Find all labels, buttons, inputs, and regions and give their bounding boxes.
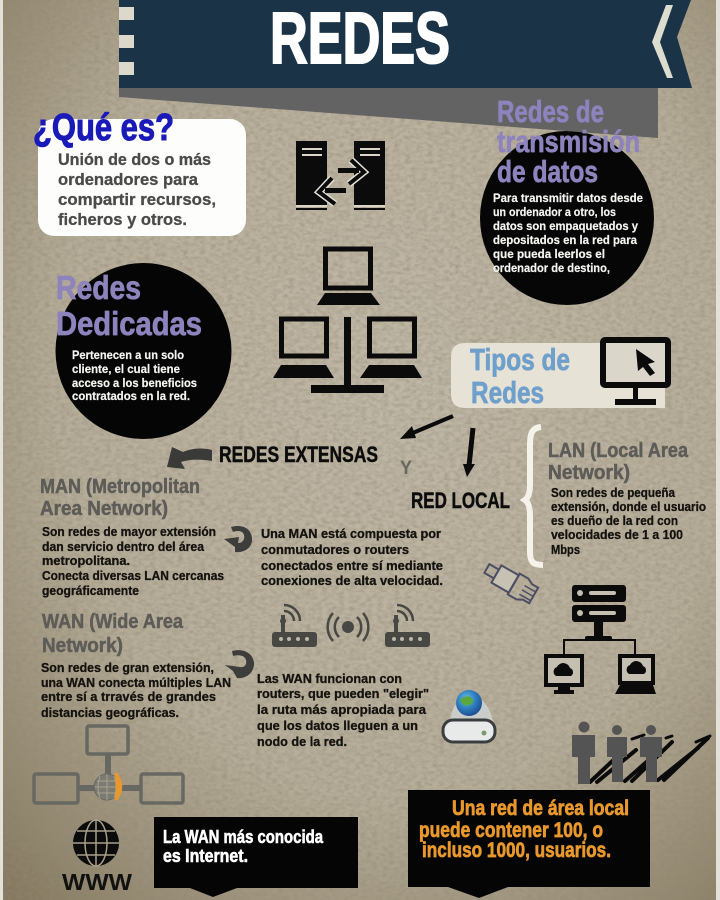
banner stripes — [119, 7, 134, 75]
text: wan detail: nodo de la red. — [257, 734, 347, 749]
text: definition: compartir recursos, — [58, 190, 216, 209]
heading: redes de transmision de datos: de datos — [497, 154, 598, 189]
text: wan detail: routers, que pueden "elegir" — [257, 686, 429, 701]
heading: man: MAN (Metropolitan — [40, 476, 200, 498]
callout: wan internet: es Internet. — [163, 846, 248, 866]
brace: lan — [525, 427, 543, 565]
text: transmision body: que pueda leerlos el — [493, 247, 605, 261]
text: definition: ficheros y otros. — [58, 210, 187, 229]
callout: lan users: puede contener 100, o — [419, 819, 603, 842]
arrow: curved to man — [167, 447, 212, 469]
text: man body: Conecta diversas LAN cercanas — [42, 568, 224, 583]
text: man detail: conexiones de alta velocidad. — [261, 573, 443, 588]
callout: lan users — [408, 790, 650, 898]
text: man body: dan servicio dentro del área — [42, 539, 205, 554]
arrow: curved man — [224, 526, 252, 552]
panel: tipos de redes — [451, 340, 668, 410]
text: dedicadas body: acceso a los beneficios — [72, 376, 197, 390]
label: y: Y — [400, 458, 412, 479]
text: man detail: conectados entre sí mediante — [261, 558, 443, 573]
text: transmision body: depositados en la red para — [493, 233, 637, 247]
text: dedicadas body: contratados en la red. — [72, 389, 190, 403]
text: wan body: entre sí a trravés de grandes — [41, 689, 216, 704]
heading: lan: LAN (Local Area — [548, 440, 689, 462]
text: lan body: extensión, donde el usuario — [551, 499, 706, 514]
heading: man — [40, 476, 200, 520]
panel: man — [40, 476, 224, 598]
icon: lan server tree — [546, 585, 656, 694]
text: wan detail: Las WAN funcionan con — [257, 671, 402, 686]
heading: redes dedicadas: Redes — [56, 269, 141, 306]
text: lan body: es dueño de la red con — [551, 513, 678, 528]
heading: tipos de redes: Redes — [471, 375, 544, 410]
panel: redes de transmision text — [493, 94, 643, 275]
panel: que es — [33, 107, 246, 236]
text: wan body: Son redes de gran extensión, — [41, 660, 214, 675]
text: definition: ordenadores para — [58, 170, 199, 189]
text: man body: geográficamente — [42, 583, 139, 598]
icon: monitor with cursor — [603, 340, 668, 405]
text: man detail — [261, 526, 443, 588]
heading: lan — [548, 440, 689, 484]
icon: globe drive — [443, 690, 495, 742]
heading: redes de transmision de datos: Redes de — [497, 94, 604, 129]
icon: servers exchanging data — [296, 141, 385, 210]
heading: redes de transmision de datos — [497, 94, 640, 189]
icon: computer network — [273, 249, 422, 393]
title: REDES — [270, 0, 450, 79]
text: lan body — [551, 485, 706, 557]
callout: wan internet — [154, 817, 358, 897]
icon: people — [572, 722, 710, 784]
text: transmision body: un ordenador a otro, los — [493, 205, 616, 219]
heading: redes dedicadas: Dedicadas — [56, 305, 202, 342]
title banner — [119, 0, 692, 88]
text: transmision body: datos son empaquetados y — [493, 219, 638, 233]
text: wan detail: la ruta más apropiada para — [257, 702, 427, 717]
arrow: curved wan — [225, 650, 254, 678]
circle: redes de transmision backdrop — [480, 131, 654, 305]
arrow: to red local — [463, 428, 475, 477]
heading: que es: ¿Qué es? — [33, 107, 174, 149]
text: wan detail: que los datos lleguen a un — [257, 718, 418, 733]
heading: redes extensas: REDES EXTENSAS — [219, 442, 378, 467]
heading: redes dedicadas — [56, 269, 202, 342]
text: dedicadas body — [72, 348, 197, 403]
text: lan body: Son redes de pequeña — [551, 485, 676, 500]
text: transmision body: ordenador de destino, — [493, 261, 610, 275]
callout: lan users: incluso 1000, usuarios. — [422, 839, 611, 862]
icon: routers and signal — [272, 605, 430, 647]
heading: red local: RED LOCAL — [411, 488, 510, 513]
text: wan body: una WAN conecta múltiples LAN — [41, 675, 231, 690]
text: transmision body — [493, 191, 643, 275]
heading: man: Area Network) — [40, 498, 168, 520]
text: man detail: Una MAN está compuesta por — [261, 526, 441, 541]
text: dedicadas body: cliente, el cual tiene — [72, 362, 180, 376]
banner shadow — [119, 86, 658, 138]
heading: wan: WAN (Wide Area — [42, 611, 184, 633]
text: man body: metropolitana. — [42, 553, 130, 568]
banner chevron — [652, 5, 673, 78]
heading: lan: Network) — [548, 462, 630, 484]
label: www: WWW — [62, 869, 132, 895]
text: transmision body: Para transmitir datos desde — [493, 191, 643, 205]
panel: wan — [41, 611, 231, 720]
text: lan body: velocidades de 1 a 100 — [551, 527, 683, 542]
callout: lan users: Una red de área local — [452, 797, 629, 820]
icon: www globe — [62, 820, 132, 895]
icon: ethernet plug — [481, 558, 540, 606]
text: man body: Son redes de mayor extensión — [42, 524, 216, 539]
arrow: to redes extensas — [400, 416, 453, 439]
text: wan detail — [257, 671, 429, 749]
heading: wan — [42, 611, 184, 657]
panel: redes dedicadas — [56, 263, 232, 439]
text: man detail: conmutadores o routers — [261, 542, 409, 557]
text: lan body: Mbps — [551, 542, 580, 557]
icon: wan diagram — [34, 726, 183, 803]
callout: wan internet: La WAN más conocida — [163, 827, 324, 847]
text: definition: Unión de dos o más — [58, 150, 211, 169]
text: definition — [58, 150, 216, 229]
people shadows — [590, 735, 710, 782]
text: wan body: distancias geográficas. — [41, 705, 179, 720]
text: dedicadas body: Pertenecen a un solo — [72, 348, 184, 362]
text: wan body — [41, 660, 231, 720]
panel: lan — [548, 440, 706, 557]
heading: redes de transmision de datos: transmisión — [497, 124, 640, 159]
heading: tipos de redes: Tipos de — [470, 342, 570, 377]
text: man body — [42, 524, 224, 598]
heading: wan: Network) — [42, 635, 123, 657]
heading: tipos de redes — [470, 342, 570, 410]
